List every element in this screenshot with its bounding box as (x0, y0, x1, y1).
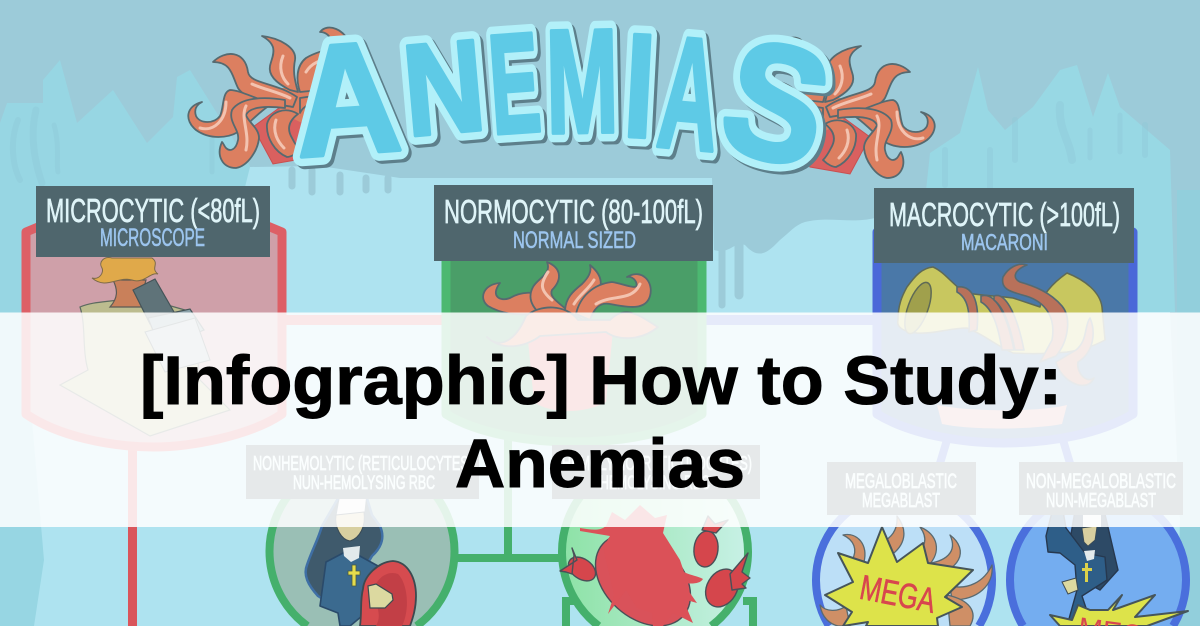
icon: anemone in cup (483, 262, 658, 411)
connector: green bracket (566, 601, 753, 626)
lower header: megaloblastic: MEGALOBLASTIC (845, 470, 957, 493)
artwork title: ANEMIAS: M (545, 0, 620, 165)
panel: microcytic (26, 222, 282, 447)
artwork title: ANEMIAS (288, 0, 847, 204)
lower header: nonhemolytic (246, 445, 479, 499)
icon: left anemone (188, 28, 352, 168)
label: MEGA: MEGA (857, 568, 939, 621)
lower header: hemolytic: HEMOLYSING RBC (600, 473, 710, 494)
panel: macrocytic (877, 232, 1133, 443)
artwork title: ANEMIAS: M (545, 0, 620, 165)
circle: hemolytic bursting red blood cell (560, 459, 753, 626)
icon: flames (820, 516, 992, 626)
header: normocytic (434, 185, 713, 261)
lower header: megaloblastic: MEGABLAST (862, 490, 940, 512)
icon: scientist looking into microscope (60, 258, 230, 436)
artwork title: ANEMIAS: A (652, 2, 727, 185)
lower header: hemolytic (552, 445, 760, 499)
icon: macaroni wrapped by tentacle (898, 264, 1105, 428)
page title: [Infographic] How to Study: (140, 342, 1062, 419)
header: microcytic: MICROCYTIC (<80fL) (46, 192, 260, 229)
connector: blue lines (935, 430, 1075, 480)
artwork title: ANEMIAS: I (620, 3, 659, 170)
icon: burst cells (560, 505, 750, 626)
panel: normocytic (446, 250, 702, 442)
icon: starburst (1050, 595, 1188, 626)
connector: red line down (128, 448, 137, 626)
header: normocytic: NORMAL SIZED (513, 227, 636, 254)
icon: right anemone (771, 38, 935, 178)
page title (140, 342, 1062, 502)
artwork title: ANEMIAS: A (288, 8, 406, 191)
header: macrocytic: MACARONI (961, 229, 1048, 255)
header: microcytic (36, 186, 270, 257)
artwork title: ANEMIAS: N (398, 11, 490, 164)
lower header: hemolytic: HEMOLYTIC (RETICULOCYTES) (562, 453, 752, 475)
artwork title: ANEMIAS: S (706, 1, 847, 204)
circle: megaloblastic (816, 492, 992, 626)
connector: blue line from normocytic to macrocytic (706, 315, 873, 325)
lower header: nonhemolytic: NUN-HEMOLYSING RBC (293, 473, 435, 494)
icon: yellow starburst (825, 527, 973, 626)
lower header: nonhemolytic: NONHEMOLYTIC (RETICULOCYTES) (253, 453, 473, 475)
artwork title: ANEMIAS: E (484, 3, 545, 165)
artwork title: ANEMIAS: I (620, 3, 659, 170)
page title: Anemias (455, 425, 745, 502)
circle: non-megaloblastic nun (1010, 492, 1188, 626)
artwork title: ANEMIAS: A (288, 8, 406, 191)
header: macrocytic (874, 188, 1134, 263)
artwork title: ANEMIAS: E (484, 3, 545, 165)
header: normocytic: NORMOCYTIC (80-100fL) (444, 193, 703, 230)
connector: red line from microcytic to normocytic (286, 315, 442, 325)
artwork title: ANEMIAS: A (652, 2, 727, 185)
translucent white title band (0, 312, 1200, 527)
artwork title: ANEMIAS: S (706, 1, 847, 204)
lower header: megaloblastic (827, 462, 976, 515)
connector: green lines (455, 430, 565, 558)
artwork title: ANEMIAS: N (398, 11, 490, 164)
circle: nonhemolytic nun with red blood cell (270, 459, 454, 626)
header: microcytic: MICROSCOPE (100, 224, 205, 252)
lower header: non-megaloblastic (1019, 462, 1183, 515)
icon: waving nun (1046, 501, 1118, 626)
icon: nun (306, 493, 416, 626)
